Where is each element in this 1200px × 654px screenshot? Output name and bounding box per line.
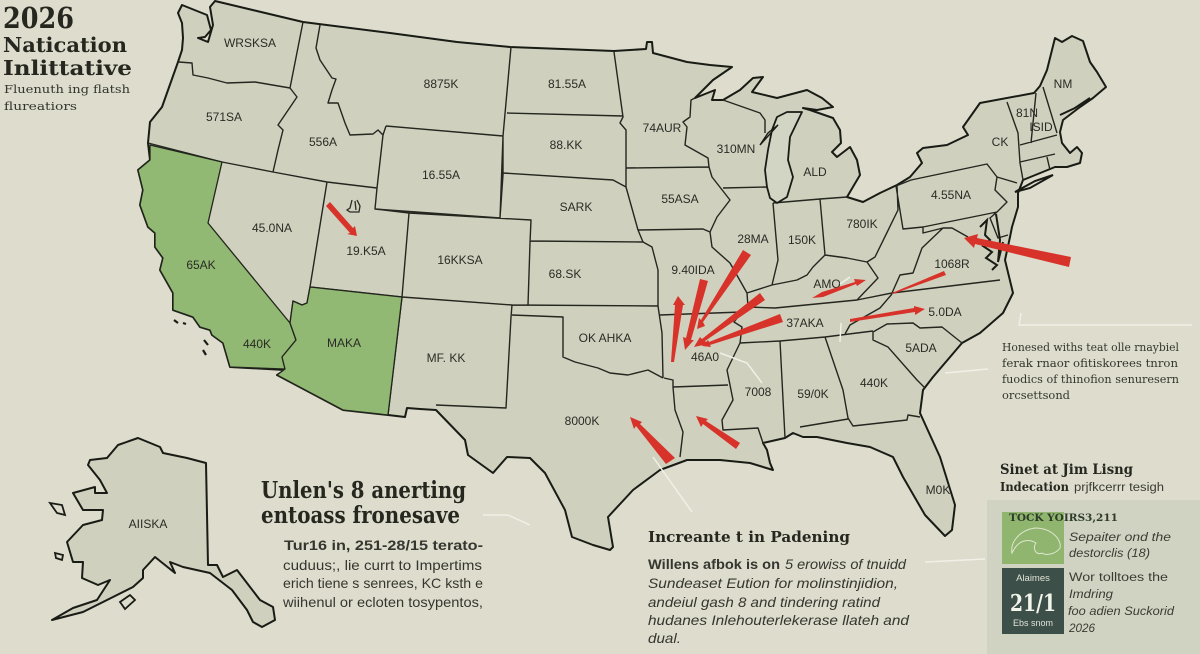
callout: increase in pandering: Sundeaset Eution for molinstinjidion, [648, 575, 898, 591]
icon: small mark in Utah [347, 200, 360, 212]
state value labels: WRSKSA [224, 36, 276, 50]
state value labels: 59/0K [797, 387, 829, 401]
callout: increase in pandering [648, 528, 910, 646]
state value labels: 46A0 [691, 350, 719, 364]
callout: increase in pandering: 5 erowiss of tnuidd [785, 556, 907, 572]
state value labels: OK AHKA [579, 331, 631, 345]
white leader lines [483, 277, 1192, 562]
legend notes: foo adien Suckorid [1068, 606, 1175, 618]
legend heading [1000, 462, 1164, 494]
state value labels: 55ASA [661, 192, 699, 206]
state value labels: MAKA [327, 336, 361, 350]
legend heading: Indecation [1000, 479, 1069, 494]
legend notes: Wor tolltoes the [1069, 572, 1168, 584]
legend notes: Imdring [1069, 589, 1114, 601]
state value labels: 556A [309, 135, 337, 149]
state value labels: SARK [560, 200, 592, 214]
legend panel [987, 500, 1200, 654]
state value labels: 74AUR [643, 121, 682, 135]
callout: right side note: fuodics of thinofion senuresern [1002, 373, 1179, 386]
state value labels: 9.40IDA [671, 263, 715, 277]
callout: increase in pandering: hudanes Inlehouterlekerase llateh and [648, 612, 910, 628]
legend notes: destorclis (18) [1069, 548, 1150, 560]
legend dark stat tile: Alaimes [1016, 573, 1050, 584]
Arizona, highlighted green [277, 287, 402, 415]
state value labels: 780IK [846, 217, 878, 231]
callout: left heading and text: wiihenul or ecloten tosypentos, [282, 594, 483, 610]
legend heading: Sinet at Jim Lisng [1000, 462, 1133, 478]
callout: increase in pandering: Increante t in Padening [648, 528, 851, 546]
state value labels: 7008 [745, 385, 772, 399]
title block: Natication [3, 33, 127, 57]
Alaska: AIISKA [129, 517, 167, 531]
state value labels: 440K [243, 337, 271, 351]
callout: right side note: orcsettsond [1002, 389, 1070, 402]
state value labels: CK [992, 135, 1008, 149]
red migration arrows [326, 202, 1071, 464]
legend dark stat tile: 21/1 [1010, 590, 1056, 617]
title block: Inlittative [3, 56, 132, 80]
callout: increase in pandering: Willens afbok is on [648, 556, 780, 572]
title block: 2026 [3, 1, 74, 35]
state value labels: 8875K [424, 77, 458, 91]
state value labels: 16KKSA [437, 253, 483, 267]
callout: left heading and text: cuduus;, lie currt to Impertims [283, 557, 482, 573]
callout: increase in pandering: dual. [648, 630, 681, 646]
California channel islands [174, 320, 208, 355]
Alaska [50, 438, 275, 627]
state value labels: 440K [860, 376, 888, 390]
title block [3, 1, 132, 113]
callout: right side note: Honesed withs teat olle rnaybiel [1002, 341, 1179, 354]
callout: left heading and text: entoass fronesave [261, 502, 460, 529]
state value labels: 81N [1016, 106, 1038, 120]
callout: right side note: ferak rnaor ofitiskorees tnron [1002, 357, 1178, 370]
state value labels [186, 36, 1072, 497]
state value labels: 28MA [737, 232, 769, 246]
legend notes: 2026 [1068, 623, 1096, 635]
callout: left heading and text: erich tiene s senrees, KC ksth e [283, 575, 483, 591]
callout: increase in pandering: andeiul gash 8 and tindering ratind [648, 594, 881, 610]
state value labels: 8000K [565, 414, 599, 428]
state value labels: ALD [803, 165, 827, 179]
state value labels: 5ADA [905, 341, 937, 355]
California, highlighted green [138, 145, 296, 369]
state value labels: AMO [813, 277, 841, 291]
callout: left heading and text: Unlen's 8 anerting [261, 477, 466, 504]
title block: Fluenuth ing flatsh [4, 83, 130, 96]
title block: flureatiors [4, 100, 77, 113]
state value labels: 310MN [717, 142, 755, 156]
state value labels: M0K [926, 483, 950, 497]
state value labels: 68.SK [549, 267, 581, 281]
state value labels: 571SA [206, 110, 242, 124]
state value labels: 37AKA [786, 316, 824, 330]
legend green swatch with icon [1002, 512, 1118, 564]
state value labels: 45.0NA [252, 221, 292, 235]
state value labels: 1068R [934, 257, 970, 271]
state value labels: 65AK [186, 258, 216, 272]
legend notes: Sepaiter ond the [1069, 532, 1171, 544]
legend green swatch with icon: TOCK YOIRS3,211 [1009, 513, 1118, 524]
state value labels: 88.KK [550, 138, 582, 152]
state value labels: ISID [1029, 120, 1053, 134]
state value labels: 5.0DA [928, 305, 962, 319]
map of contiguous states [138, 1, 1106, 550]
state value labels: MF. KK [427, 351, 465, 365]
callout: right side note [1002, 341, 1179, 402]
legend heading: prjfkcerrr tesigh [1074, 482, 1164, 494]
state value labels: 150K [788, 233, 816, 247]
state value labels: 4.55NA [931, 188, 971, 202]
legend notes [1068, 532, 1175, 635]
state value labels: 16.55A [422, 168, 460, 182]
legend dark stat tile: Ebs snom [1013, 618, 1053, 628]
legend dark stat tile [1002, 568, 1064, 634]
callout: left heading and text [261, 477, 483, 610]
state value labels: 19.K5A [346, 244, 386, 258]
state value labels: 81.55A [548, 77, 586, 91]
callout: left heading and text: Tur16 in, 251-28/15 terato- [284, 537, 483, 553]
state value labels: NM [1054, 77, 1072, 91]
